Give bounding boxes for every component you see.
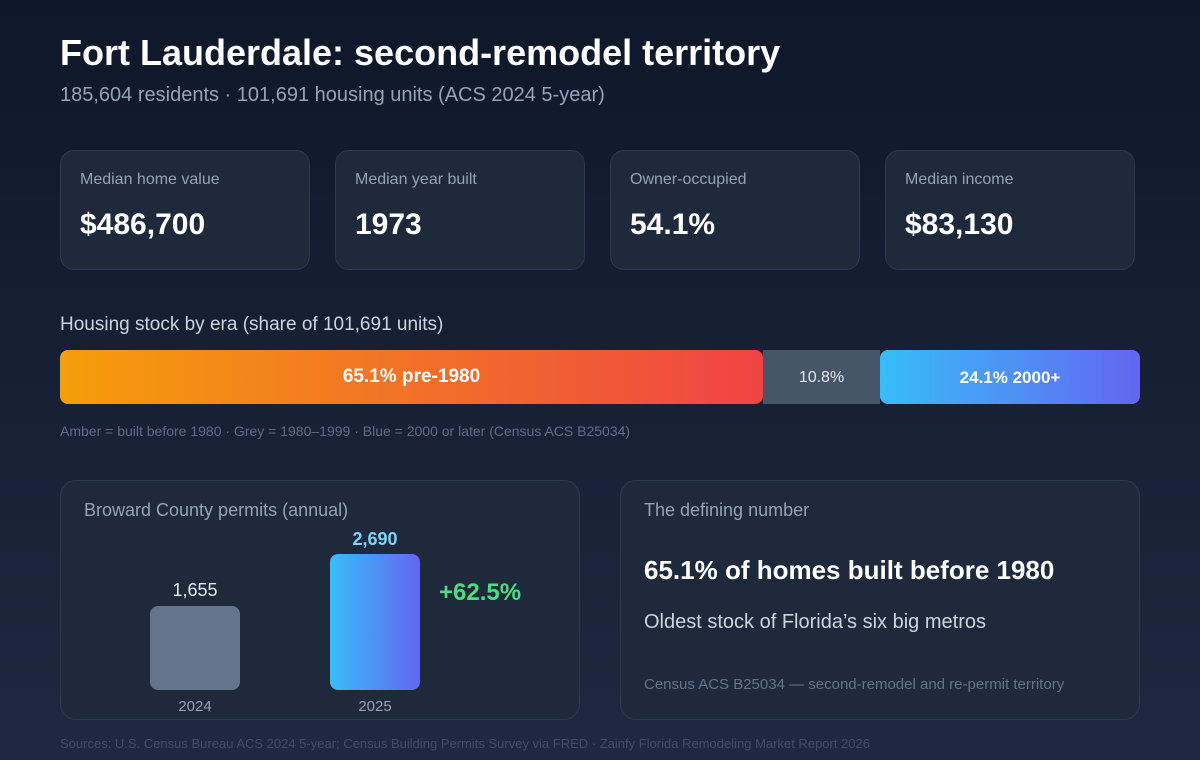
panel: median income: [885, 150, 1135, 270]
label: median income: Median income: [905, 171, 1014, 188]
bar: 2025: [330, 554, 420, 690]
stacked bar chart: housing stock by era: [60, 350, 1140, 404]
bar: 2024: [150, 606, 240, 690]
footer sources: Sources: U.S. Census Bureau ACS 2024 5-year; Census Building Permits Survey via FRED · Zainfy Florida Remodeling Market Report 2026: [60, 736, 870, 751]
value: owner-occupied: 54.1%: [630, 208, 715, 241]
panel: Broward County permits: [60, 480, 580, 720]
segment: 10.8% 1980 to 1999: [763, 350, 880, 404]
value: 2024 permits: 1,655: [172, 580, 218, 600]
segment: 65.1% pre-1980: 65.1% pre-1980: [343, 366, 480, 387]
panel: owner-occupied: [610, 150, 860, 270]
panel heading: permits: Broward County permits (annual): [84, 500, 348, 520]
value: median income: $83,130: [905, 208, 1013, 241]
axis label: 2024: 2024: [178, 698, 212, 715]
value: 2025 permits: 2,690: [352, 529, 398, 549]
segment: 24.1% 2000+: [880, 350, 1140, 404]
heading: housing stock by era: Housing stock by era (share of 101,691 units): [60, 314, 443, 335]
callout: +62.5% growth: +62.5%: [439, 579, 521, 606]
supporting text: Oldest stock of Florida’s six big metros: [644, 611, 986, 633]
panel: the defining number: [620, 480, 1140, 720]
segment: 65.1% pre-1980: [60, 350, 763, 404]
segment: 10.8% 1980 to 1999: 10.8%: [799, 369, 844, 386]
label: median year built: Median year built: [355, 171, 477, 188]
value: median home value: $486,700: [80, 208, 205, 241]
panel heading: defining number: The defining number: [644, 500, 809, 520]
title: Fort Lauderdale: second-remodel territory: [60, 32, 780, 73]
label: owner-occupied: Owner-occupied: [630, 171, 746, 188]
value: median year built: 1973: [355, 208, 422, 241]
source note: Census ACS B25034 — second-remodel and re-permit territory: [644, 676, 1064, 693]
axis label: 2025: 2025: [358, 698, 392, 715]
legend note: Amber = built before 1980 · Grey = 1980–1999 · Blue = 2000 or later (Census ACS B25034): [60, 423, 630, 439]
segment: 24.1% 2000+: 24.1% 2000+: [960, 368, 1060, 387]
label: median home value: Median home value: [80, 171, 220, 188]
panel: median year built: [335, 150, 585, 270]
headline statistic: 65.1% of homes built before 1980: [644, 555, 1054, 585]
subtitle: 185,604 residents · 101,691 housing units (ACS 2024 5-year): [60, 84, 605, 106]
panel: median home value: [60, 150, 310, 270]
